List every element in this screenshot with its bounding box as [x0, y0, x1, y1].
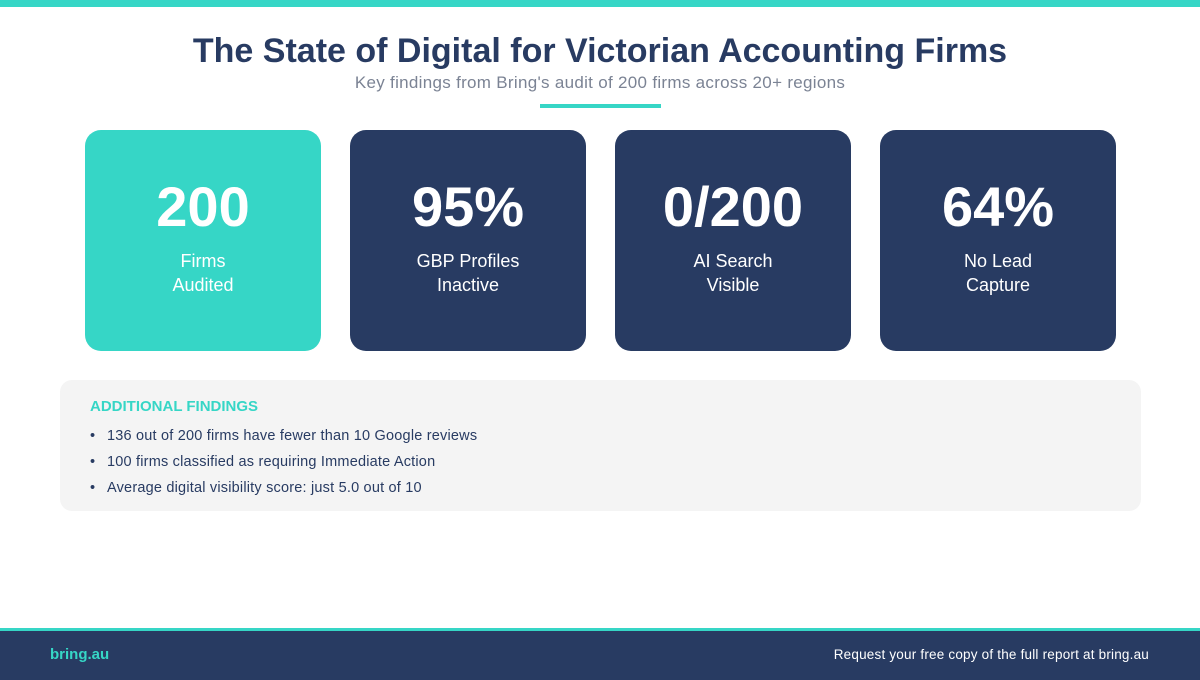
card: lead capture: Capture	[966, 275, 1030, 295]
card: lead capture	[880, 130, 1116, 351]
card: firms audited	[85, 130, 321, 351]
card: GBP inactive: Inactive	[437, 275, 499, 295]
card: AI search	[615, 130, 851, 351]
finding 3: Average digital visibility score: just 5.0 out of 10	[107, 480, 422, 496]
card: AI search: AI Search	[693, 251, 773, 271]
finding 2: 100 firms classified as requiring Immediate Action	[107, 454, 435, 470]
card: firms audited: Audited	[172, 275, 234, 295]
finding 2: •	[90, 454, 95, 470]
card: lead capture: 64%	[942, 175, 1054, 238]
card: GBP inactive	[350, 130, 586, 351]
card: firms audited: 200	[156, 175, 250, 238]
panel: additional findings	[60, 380, 1141, 511]
card: GBP inactive: GBP Profiles	[417, 251, 519, 271]
card: AI search: Visible	[707, 275, 759, 295]
footer: bring.au	[50, 646, 109, 663]
subtitle: Key findings from Bring's audit of 200 firms across 20+ regions	[355, 73, 845, 92]
title: The State of Digital for Victorian Accounting Firms	[193, 32, 1007, 70]
finding 1: 136 out of 200 firms have fewer than 10 Google reviews	[107, 428, 477, 444]
finding 1: •	[90, 428, 95, 444]
panel heading: ADDITIONAL FINDINGS	[90, 398, 258, 415]
card: lead capture: No Lead	[964, 251, 1032, 271]
card: GBP inactive: 95%	[412, 175, 524, 238]
footer: Request your free copy of the full report at bring.au	[834, 647, 1149, 662]
footer	[0, 628, 1200, 680]
finding 3: •	[90, 480, 95, 496]
card: AI search: 0/200	[663, 175, 803, 238]
card: firms audited: Firms	[180, 251, 225, 271]
